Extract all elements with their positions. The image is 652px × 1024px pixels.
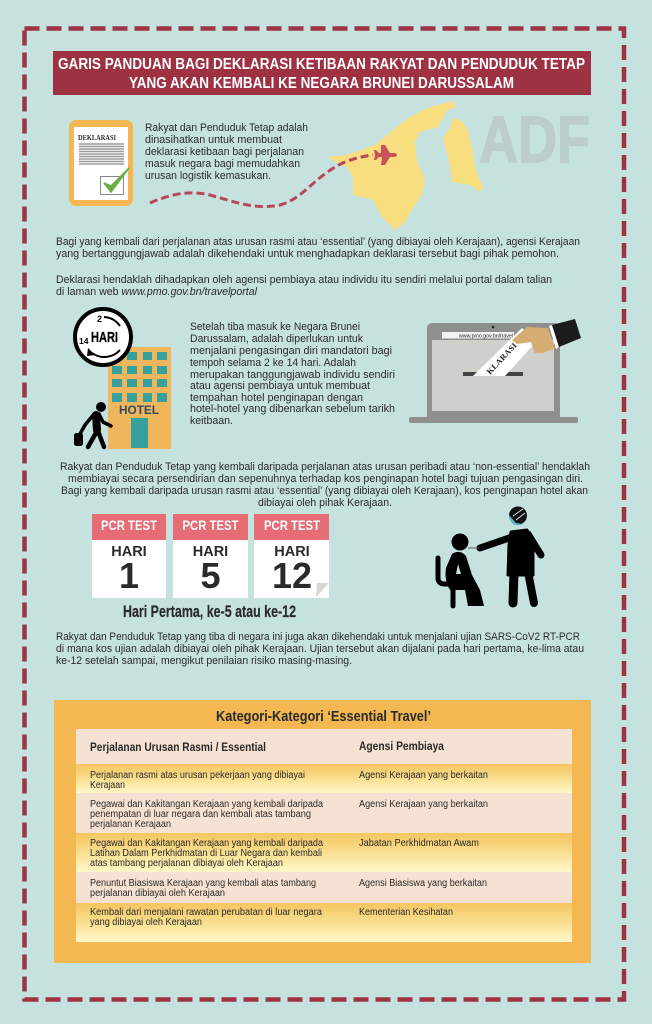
title banner: GARIS PANDUAN BAGI DEKLARASI KETIBAAN RAKYAT DAN PENDUDUK TETAP [58,56,585,73]
table row 5: Kementerian Kesihatan [359,907,453,918]
text: quarantine paragraph: Darussalam, adalah diperlukan untuk [190,333,363,345]
text: official travel paragraph: Bagi yang kembali dari perjalanan atas urusan rasmi atau ‘essential’ (yang dibiayai oleh Kerajaan), agensi Kerajaan [56,236,580,248]
arrow: dashed flight path [150,155,373,207]
text: quarantine paragraph [190,321,395,427]
text: intro paragraph: Rakyat dan Penduduk Tetap adalah [145,122,308,134]
table row 3: atas tambang perjalanan dibiayai oleh Kerajaan [90,858,283,869]
icon: hotel [108,347,171,449]
text: intro paragraph: dinasihatkan untuk membuat [145,134,282,146]
text: quarantine paragraph: Setelah tiba masuk ke Negara Brunei [190,321,360,333]
panel: essential travel categories [54,700,591,963]
icon: laptop submitting declaration: www.pmo.gov.bn/travel [458,334,513,340]
table row 3: Jabatan Perkhidmatan Awam [359,838,479,849]
calendar card: day 12: 12 [272,555,312,596]
calendar card: day 5: 5 [200,555,221,596]
text: intro paragraph: deklarasi ketibaan bagi perjalanan [145,146,304,158]
table row 4 [76,872,572,903]
map: Brunei [327,101,483,230]
table row 3: Pegawai dan Kakitangan Kerajaan yang kembali daripada [90,838,323,849]
text: hotel cost paragraph: Bagi yang kembali daripada urusan rasmi atau ‘essential’ (yang dibiayai oleh Kerajaan), kos penginapan hotel akan [61,485,588,497]
text: intro paragraph [145,122,308,182]
text: hotel cost paragraph: dibiayai oleh pihak Kerajaan. [258,497,392,509]
icon: hotel: HOTEL [119,405,159,417]
calendar card: day 5: HARI [193,544,228,560]
icon: 2 to 14 days clock: HARI [91,329,118,346]
text: PCR paragraph: Rakyat dan Penduduk Tetap yang tiba di negara ini juga akan dikehendaki untuk menjalani ujian SARS-CoV2 RT-PCR [56,631,580,643]
calendar card: day 5: PCR TEST [182,517,239,533]
icon: 2 to 14 days clock: 2 [97,314,102,324]
calendar card: day 12: HARI [274,544,310,560]
text: quarantine paragraph: atau agensi pembiaya untuk membuat [190,380,370,392]
calendar card: day 1: PCR TEST [101,517,157,533]
title banner [53,51,591,95]
text: portal paragraph [56,274,552,298]
table row 5: yang dibiayai oleh Kerajaan [90,917,202,928]
table row 4: perjalanan dibiayai oleh Kerajaan [90,888,225,899]
text: PCR paragraph [56,631,584,667]
text: PCR paragraph: di mana kos ujian adalah dibiayai oleh pihak Kerajaan. Ujian tersebut akan dijalani pada hari pertama, ke-lima atau [56,643,584,655]
text: quarantine paragraph: merupakan tanggungjawab individu sendiri [190,369,395,381]
calendar card: day 1: 1 [119,555,139,596]
icon: laptop submitting declaration: KLARASI [485,341,519,376]
text: intro paragraph: masuk negara bagi memudahkan [145,158,300,170]
table row 3 [76,833,572,872]
icon: traveller with suitcase [74,402,111,447]
icon: 2 to 14 days clock [75,309,131,365]
table header [76,729,572,764]
calendar card: day 12 [254,514,329,598]
icon: declaration form [69,120,133,206]
table header: Perjalanan Urusan Rasmi / Essential [90,742,266,754]
watermark: ADF: ADF [479,102,590,176]
table row 1 [76,764,572,793]
calendar card: day 1: HARI [111,544,147,560]
subheading: test days: Hari Pertama, ke-5 atau ke-12 [123,602,296,621]
table row 1: Kerajaan [90,780,125,791]
table row 2: Agensi Kerajaan yang berkaitan [359,799,488,810]
table row 5: Kembali dari menjalani rawatan perubatan di luar negara [90,907,322,918]
table row 2: perjalanan Kerajaan [90,819,171,830]
table row 4: Agensi Biasiswa yang berkaitan [359,878,487,889]
text: official travel paragraph [56,236,580,260]
calendar card: day 5 [173,514,248,598]
calendar card: day 12: PCR TEST [264,517,320,533]
text: hotel cost paragraph: membiayai secara persendirian dan sepenuhnya terhadap kos penginapan hotel bagi tujuan pengasingan diri. [68,473,583,485]
panel heading: Kategori-Kategori ‘Essential Travel’ [216,708,431,725]
table row 2 [76,793,572,833]
table header: Agensi Pembiaya [359,741,445,753]
text: portal paragraph: Deklarasi hendaklah dihadapkan oleh agensi pembiaya atau individu itu sendiri melalui portal dalam talian [56,274,552,286]
icon: health worker swabbing seated person [438,506,541,606]
text: quarantine paragraph: menjalani pengasingan diri mandatori bagi [190,345,392,357]
text: official travel paragraph: yang bertanggungjawab adalah dikehendaki untuk menghadapkan deklarasi tersebut bagi pihak pemohon. [56,248,559,260]
table row 2: penempatan di luar negara dan kembali atas tambang [90,809,311,820]
table row 4: Penuntut Biasiswa Kerajaan yang kembali atas tambang [90,878,316,889]
text: quarantine paragraph: keitbaan. [190,415,233,427]
text: portal paragraph: di laman web www.pmo.gov.bn/travelportal [56,286,258,298]
text: hotel cost paragraph: Rakyat dan Penduduk Tetap yang kembali daripada perjalanan atas urusan peribadi atau ‘non-essential’ hendaklah [60,461,590,473]
icon: airplane [374,145,397,165]
title banner: YANG AKAN KEMBALI KE NEGARA BRUNEI DARUSSALAM [129,75,514,92]
text: quarantine paragraph: tempoh selama 2 ke 14 hari. Adalah [190,357,356,369]
table row 3: Latihan Dalam Perkhidmatan di Luar Negara dan kembali [90,848,322,859]
icon: 2 to 14 days clock: 14 [79,336,89,346]
icon: declaration form: DEKLARASI [78,134,116,142]
text: PCR paragraph: ke-12 setelah sampai, mengikut penilaian risiko masing-masing. [56,655,352,667]
text: hotel cost paragraph [60,461,590,509]
calendar card: day 1 [92,514,166,598]
text: quarantine paragraph: hotel-hotel yang dibenarkan sebelum tarikh [190,403,395,415]
table row 5 [76,903,572,942]
icon: laptop submitting declaration [409,319,581,423]
text: intro paragraph: urusan logistik kemasukan. [145,170,271,182]
table row 1: Agensi Kerajaan yang berkaitan [359,770,488,781]
text: quarantine paragraph: tempahan hotel penginapan dengan [190,392,363,404]
table row 2: Pegawai dan Kakitangan Kerajaan yang kembali daripada [90,799,323,810]
table row 1: Perjalanan rasmi atas urusan pekerjaan yang dibiayai [90,770,305,781]
